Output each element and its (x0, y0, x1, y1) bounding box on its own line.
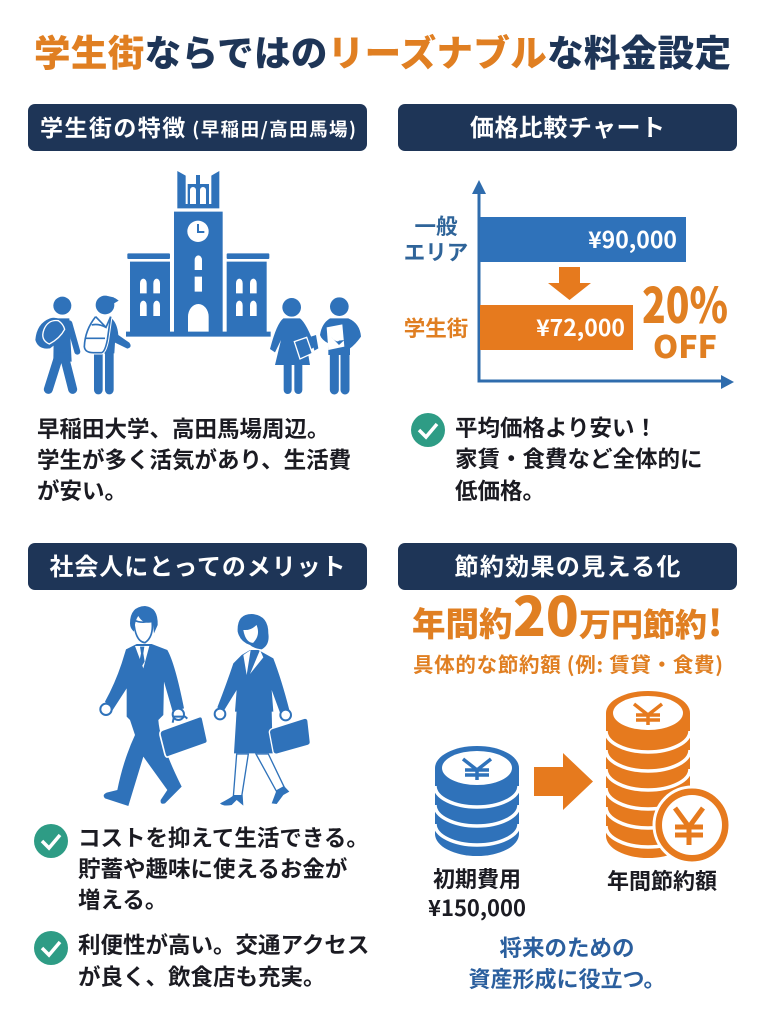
text: merit 1: コストを抑えて生活できる。 (78, 821, 369, 853)
illustration: university and students (35, 171, 361, 390)
label: general area: 一般 (414, 210, 458, 241)
title: 学生街ならではのリーズナブルな料金設定 (34, 24, 731, 77)
text: merit 2: が良く、飲食店も充実。 (78, 960, 326, 992)
callout: 20% off: 20% (642, 267, 728, 338)
icon: blue coin stack (435, 746, 519, 856)
text: merit 1 (34, 821, 369, 915)
text: features (37, 412, 351, 506)
headline: annual savings: 万円節約 (579, 600, 707, 646)
headline: annual savings: ! (708, 595, 722, 647)
icon: businessman (100, 606, 207, 806)
panel: student district features (28, 104, 367, 506)
label: general area: エリア (404, 236, 468, 267)
text: price note: 平均価格より安い！ (455, 411, 657, 443)
heading: price comparison: 価格比較チャート (470, 108, 665, 143)
bar: student district (480, 305, 633, 350)
text: price note: 家賃・食費など全体的に (455, 442, 703, 474)
icon: businesswoman (215, 614, 310, 806)
text: merit 1: 貯蓄や趣味に使えるお金が (78, 852, 348, 884)
label: general area (404, 210, 468, 267)
chart axes (479, 184, 728, 381)
heading: visualized savings: 節約効果の見える化 (454, 547, 680, 582)
callout: 20% off (642, 267, 728, 367)
label: initial cost (428, 862, 526, 923)
text: future assets: 将来のための (499, 931, 635, 963)
text: merit 2 (34, 928, 369, 992)
text: future assets (468, 931, 666, 994)
subheading: savings example: 具体的な節約額 (例: 賃貸・食費) (413, 648, 723, 678)
label: initial cost: 初期費用 (433, 862, 521, 894)
icon: check (411, 413, 445, 447)
label: annual savings: 年間節約額 (607, 864, 717, 896)
panel: visualized savings (398, 543, 737, 994)
panel: price comparison (398, 104, 737, 506)
label: student district: 学生街 (404, 312, 468, 343)
icon: female student (270, 298, 318, 390)
headline: annual savings: 年間約 (412, 597, 512, 646)
bar: general area (480, 217, 686, 262)
heading: student district features (28, 104, 367, 151)
callout: 20% off: OFF (653, 322, 717, 367)
heading: student district features: 学生街の特徴 (早稲田/高田馬場) (40, 109, 356, 143)
bar: general area: ¥90,000 (588, 221, 677, 255)
heading: merits (28, 543, 367, 590)
text: merit 1: 増える。 (78, 883, 167, 915)
text: features: 学生が多く活気があり、生活費 (37, 443, 351, 475)
text: features: 早稲田大学、高田馬場周辺。 (37, 412, 330, 444)
heading: merits: 社会人にとってのメリット (50, 547, 346, 582)
headline: annual savings: 20 (513, 573, 579, 652)
arrow: right (534, 753, 593, 810)
heading: price comparison (398, 104, 737, 151)
arrow: down (548, 267, 591, 300)
illustration: business people walking (100, 606, 310, 806)
text: merit 2: 利便性が高い。交通アクセス (78, 928, 369, 960)
text: features: が安い。 (37, 474, 127, 506)
label: initial cost: ¥150,000 (428, 891, 526, 923)
bar chart: price comparison (404, 180, 734, 389)
icon: check (34, 931, 68, 965)
icon: student with backpack (35, 297, 77, 389)
icon: university building (126, 171, 271, 337)
text: price note (411, 411, 703, 506)
text: price note: 低価格。 (455, 474, 545, 506)
icon: student holding books (320, 297, 361, 390)
panel: merits for working adults (28, 543, 369, 992)
icon: check (34, 824, 68, 858)
icon: student with cap (84, 296, 131, 390)
text: future assets: 資産形成に役立つ。 (468, 962, 666, 994)
heading: visualized savings (398, 543, 737, 590)
bar: student district: ¥72,000 (536, 309, 625, 343)
icon: orange coin stack (606, 691, 730, 863)
